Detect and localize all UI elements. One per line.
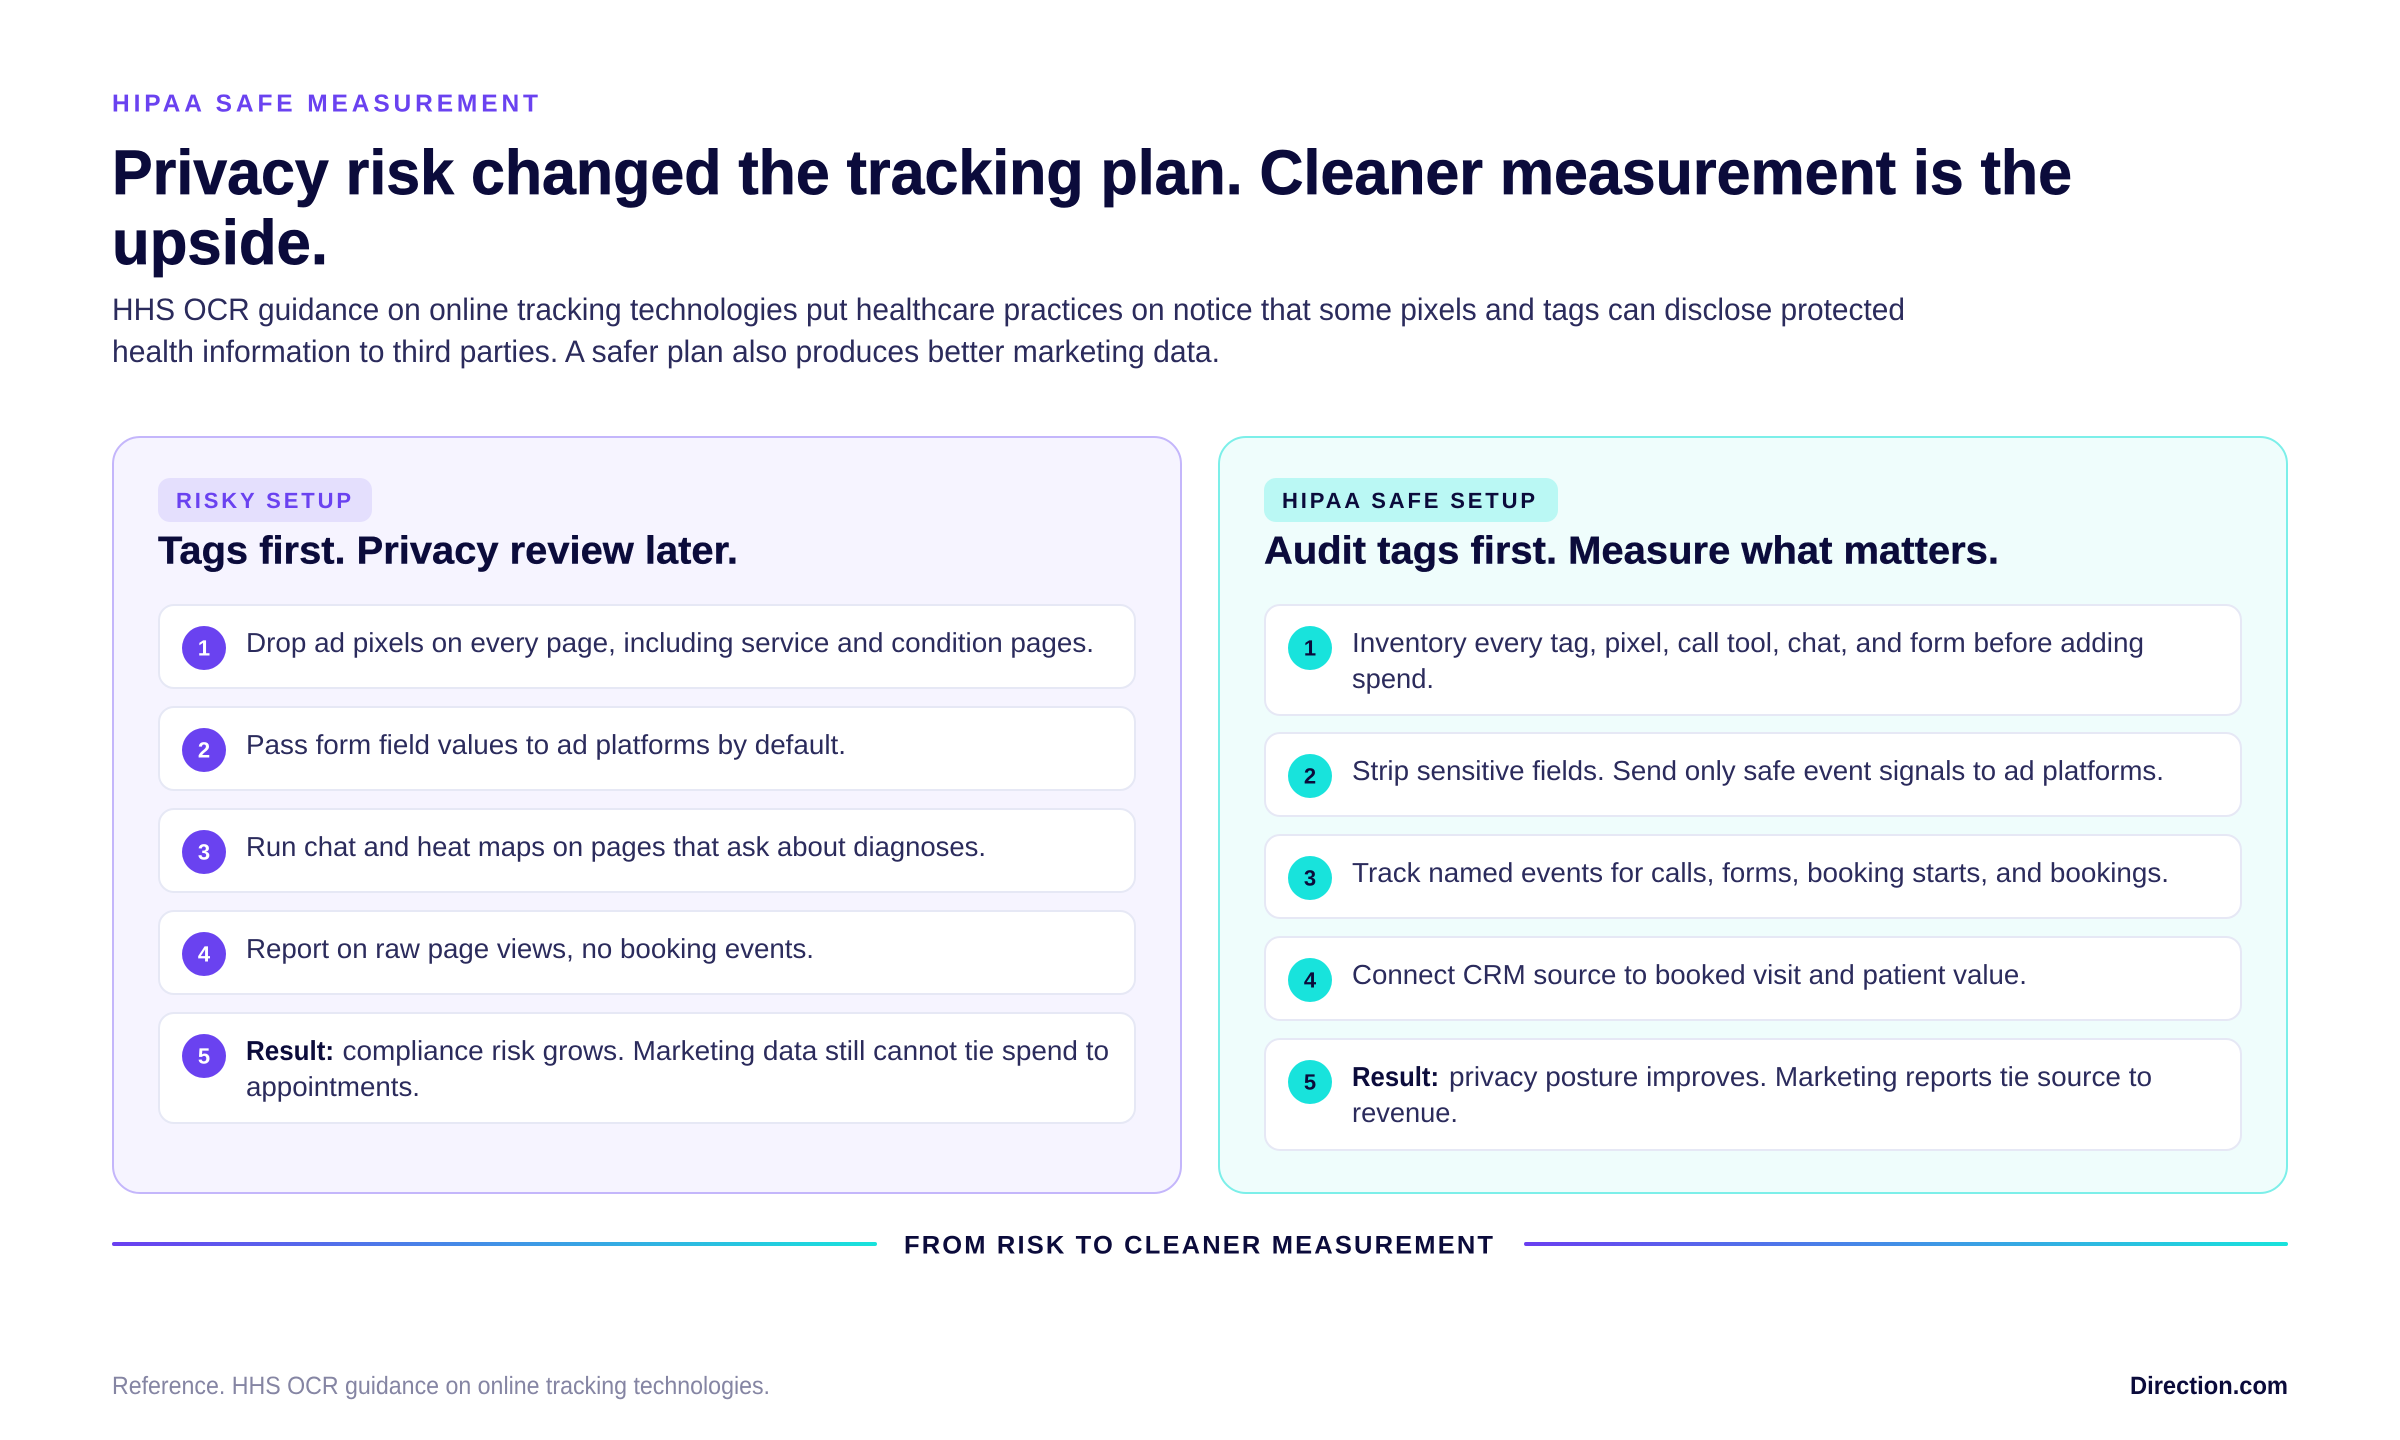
panel heading: risky: Tags first. Privacy review later. (158, 530, 738, 572)
step 3: risky: 3 (198, 840, 210, 864)
step 2: safe: Strip sensitive fields. Send only safe event signals to ad platforms. (1352, 755, 2164, 786)
step 5: risky result: Result: (246, 1035, 334, 1066)
panel: risky setup (113, 437, 1181, 1193)
title: upside. (112, 208, 328, 278)
step 3: safe (1265, 835, 2241, 918)
badge: hipaa safe setup: HIPAA SAFE SETUP (1282, 488, 1535, 513)
step 4: risky: Report on raw page views, no booking events. (246, 933, 814, 964)
panel heading: safe: Audit tags first. Measure what matters. (1264, 530, 1999, 572)
step 5: risky result: compliance risk grows. Marketing data still cannot tie spend to (342, 1035, 1109, 1066)
footer: reference: Reference. HHS OCR guidance on online tracking technologies. (112, 1372, 770, 1400)
step 3: safe: Track named events for calls, forms, booking starts, and bookings. (1352, 857, 2169, 888)
step 1: safe: Inventory every tag, pixel, call tool, chat, and form before adding (1352, 627, 2144, 658)
step 5: safe result: revenue. (1352, 1097, 1458, 1128)
step 2: risky: Pass form field values to ad platforms by default. (246, 729, 846, 760)
step 1: safe (1265, 605, 2241, 715)
panel: hipaa safe setup (1219, 437, 2287, 1193)
step 3: risky (159, 809, 1135, 892)
step 2: risky (159, 707, 1135, 790)
step 1: risky: Drop ad pixels on every page, including service and condition pages. (246, 627, 1094, 658)
eyebrow: HIPAA SAFE MEASUREMENT (112, 90, 538, 118)
transition divider (112, 1232, 2288, 1260)
step 4: risky (159, 911, 1135, 994)
step 3: safe: 3 (1304, 866, 1316, 890)
step 5: risky result: 5 (198, 1044, 210, 1068)
step 1: safe: 1 (1304, 636, 1316, 660)
step 4: safe: Connect CRM source to booked visit and patient value. (1352, 959, 2027, 990)
step 3: risky: Run chat and heat maps on pages that ask about diagnoses. (246, 831, 986, 862)
step 5: safe result (1265, 1039, 2241, 1150)
title: Privacy risk changed the tracking plan. Cleaner measurement is the (112, 138, 2072, 208)
subtitle: HHS OCR guidance on online tracking technologies put healthcare practices on notice that some pixels and tags can disclose protected (112, 292, 1905, 327)
step 4: risky: 4 (198, 942, 211, 966)
badge: risky setup: RISKY SETUP (176, 488, 351, 513)
step 5: risky result (159, 1013, 1135, 1123)
step 2: safe: 2 (1304, 764, 1316, 788)
step 5: safe result: 5 (1304, 1070, 1316, 1094)
step 5: risky result: appointments. (246, 1071, 420, 1102)
step 5: safe result: privacy posture improves. Marketing reports tie source to (1449, 1061, 2152, 1092)
transition divider: FROM RISK TO CLEANER MEASUREMENT (904, 1232, 1493, 1260)
step 2: safe (1265, 733, 2241, 816)
subtitle (112, 292, 1905, 369)
step 4: safe (1265, 937, 2241, 1020)
step 1: safe: spend. (1352, 663, 1434, 694)
badge: risky setup (158, 478, 372, 522)
step 1: risky: 1 (198, 636, 210, 660)
step 2: risky: 2 (198, 738, 210, 762)
step 5: safe result: Result: (1352, 1061, 1439, 1092)
subtitle: health information to third parties. A safer plan also produces better marketing data. (112, 334, 1220, 369)
footer: brand: Direction.com (2130, 1372, 2288, 1400)
badge: hipaa safe setup (1264, 478, 1558, 522)
step 1: risky (159, 605, 1135, 688)
title (112, 138, 2072, 278)
step 4: safe: 4 (1304, 968, 1317, 992)
